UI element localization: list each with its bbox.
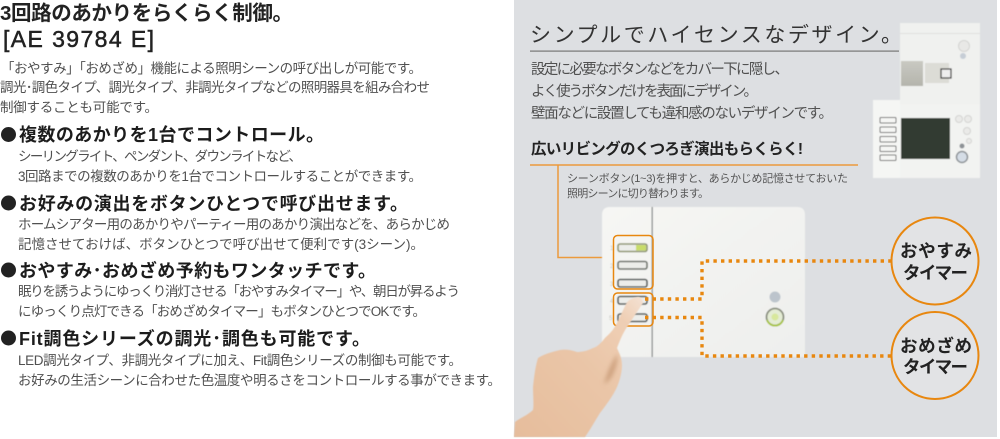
callout: wake timer: おめざめ <box>900 336 972 356</box>
panel: product overview <box>0 2 501 388</box>
subheading: 広いリビングのくつろぎ演出もらくらく! <box>531 139 803 158</box>
callout: wake timer: タイマー <box>903 357 968 377</box>
feature: scene buttons: お好みの演出をボタンひとつで呼び出せます。 <box>19 194 408 214</box>
feature: multiple lights: 3回路までの複数のあかりを1台でコントロールすることができます。 <box>18 168 422 184</box>
title: 3回路のあかりをらくらく制御。 <box>0 2 293 25</box>
intro text: 調光･調色タイプ、調光タイプ、非調光タイプなどの照明器具を組み合わせ <box>0 80 430 95</box>
icon: hand pressing button <box>514 297 643 437</box>
highlight boxes <box>614 236 653 326</box>
button numbers: 1 <box>610 246 614 252</box>
dotted connector: wake timer <box>645 318 892 356</box>
button numbers: 2 <box>610 264 614 270</box>
button numbers <box>609 246 614 322</box>
product photo: open controller <box>873 23 980 178</box>
scene buttons <box>618 244 647 322</box>
callout: sleep timer <box>892 218 978 304</box>
dotted connector: sleep timer <box>645 261 892 299</box>
callout: wake timer <box>892 312 978 399</box>
feature: Fit series: お好みの生活シーンに合わせた色温度や明るさをコントロールする事ができます。 <box>18 373 501 388</box>
button numbers: 5 <box>609 316 613 322</box>
feature: timers: 眠りを誘うようにゆっくり消灯させる「おやすみタイマー」や、朝日が昇るよう <box>18 284 460 299</box>
indicator lamps <box>766 292 784 326</box>
product photo: wall controller <box>602 207 805 357</box>
feature: timers <box>1 260 460 319</box>
intro text: 「おやすみ」「おめざめ」機能による照明シーンの呼び出しが可能です。 <box>1 60 422 76</box>
button numbers: 3 <box>610 282 614 288</box>
design text <box>531 61 833 122</box>
panel: design <box>514 0 997 437</box>
feature: Fit series: Fit調色シリーズの調光･調色も可能です。 <box>19 328 370 349</box>
callout: scene buttons <box>530 165 858 258</box>
intro text: 制御することも可能です。 <box>0 100 158 115</box>
feature: scene buttons <box>1 194 450 252</box>
feature: multiple lights: シーリングライト、ペンダント、ダウンライトなど、 <box>18 149 302 164</box>
feature: scene buttons: ホームシアター用のあかりやパーティー用のあかり演出などを、あらかじめ <box>18 217 450 232</box>
intro text <box>0 60 430 115</box>
callout: sleep timer: おやすみ <box>900 241 972 261</box>
callout: scene buttons: シーンボタン(1~3)を押すと、あらかじめ記憶させておいた <box>567 171 848 185</box>
callout: sleep timer: タイマー <box>903 263 968 283</box>
design text: 設定に必要なボタンなどをカバー下に隠し、 <box>531 61 789 78</box>
feature: Fit series <box>1 328 501 388</box>
feature: multiple lights: 複数のあかりを1台でコントロール。 <box>19 124 324 145</box>
feature: multiple lights <box>1 124 422 184</box>
design text: 壁面などに設置しても違和感のないデザインです。 <box>531 104 833 122</box>
feature: scene buttons: 記憶させておけば、ボタンひとつで呼び出せて便利です(3シーン)。 <box>18 237 424 252</box>
callout: scene buttons: 照明シーンに切り替わります。 <box>567 186 709 200</box>
design text: よく使うボタンだけを表面にデザイン。 <box>531 82 758 100</box>
feature: timers: にゆっくり点灯できる「おめざめタイマー」もボタンひとつでOKです。 <box>18 303 426 319</box>
model number: [AE 39784 E] <box>3 26 154 52</box>
design heading: シンプルでハイセンスなデザイン。 <box>530 24 902 47</box>
button numbers: 4 <box>610 299 614 305</box>
feature: timers: おやすみ･おめざめ予約もワンタッチです。 <box>19 260 376 281</box>
feature: Fit series: LED調光タイプ、非調光タイプに加え、Fit調色シリーズの制御も可能です。 <box>18 353 462 368</box>
